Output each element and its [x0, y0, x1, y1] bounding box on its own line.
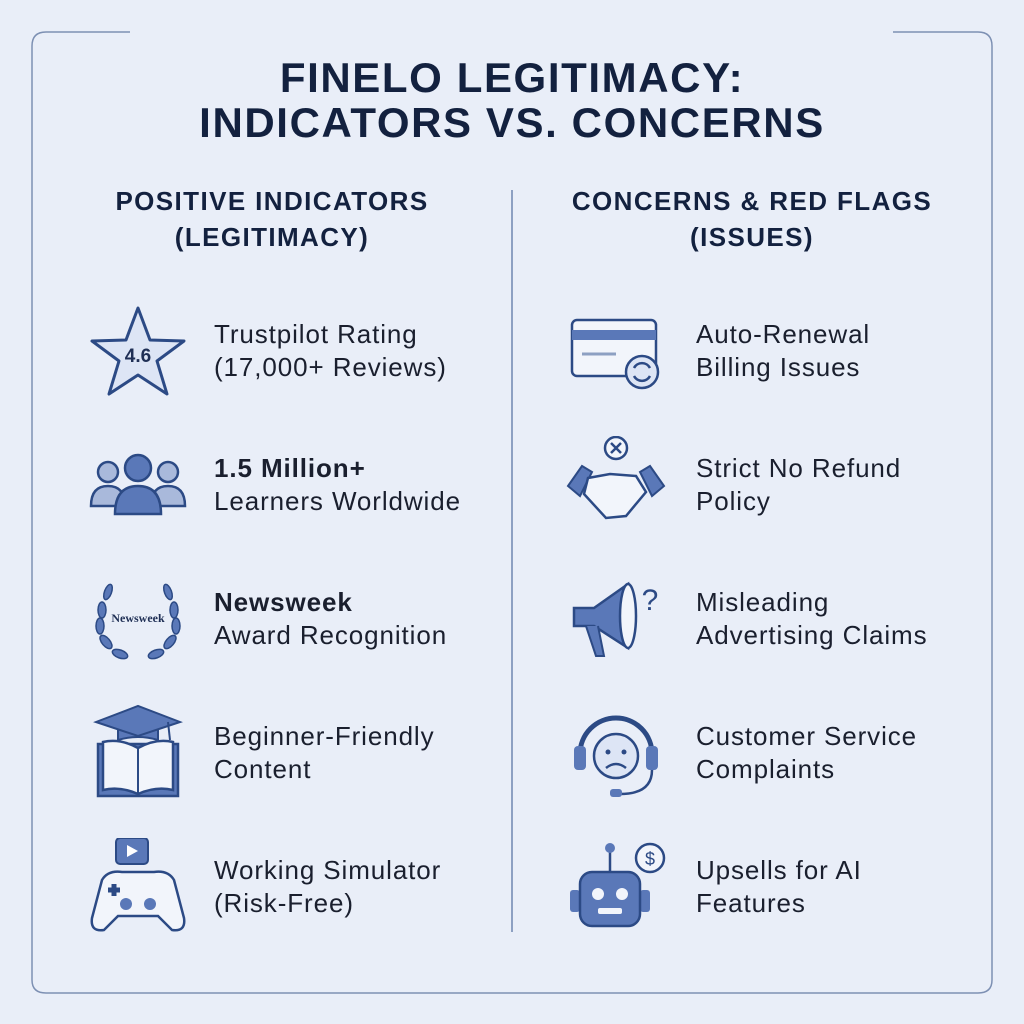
- text: auto-renewal: Auto-Renewal: [696, 319, 870, 349]
- text: upsells: Features: [696, 888, 806, 918]
- text: advertising: Advertising Claims: [696, 620, 928, 650]
- heading: concerns: (ISSUES): [690, 222, 814, 252]
- text: simulator: Working Simulator: [214, 855, 441, 885]
- text: upsells: [696, 855, 862, 918]
- text: customer service: Complaints: [696, 754, 835, 784]
- text: auto-renewal: Billing Issues: [696, 352, 860, 382]
- heading: concerns: CONCERNS & RED FLAGS: [572, 186, 932, 216]
- icon: laurel: [95, 584, 181, 660]
- icon: robot: [570, 842, 666, 928]
- icon: star: [90, 306, 186, 396]
- icon: megaphone: [572, 582, 658, 657]
- heading: positive: (LEGITIMACY): [175, 222, 369, 252]
- heading: positive: POSITIVE INDICATORS: [115, 186, 429, 216]
- text: trustpilot: Trustpilot Rating: [214, 319, 418, 349]
- icon: people: [90, 454, 186, 516]
- text: newsweek: [214, 587, 447, 650]
- title: FINELO LEGITIMACY:: [280, 54, 744, 101]
- text: simulator: [214, 855, 441, 918]
- text: refund: [696, 453, 901, 516]
- text: trustpilot: (17,000+ Reviews): [214, 352, 447, 382]
- text: advertising: Misleading: [696, 587, 829, 617]
- text: learners: 1.5 Million+: [214, 453, 366, 483]
- icon: gamepad: [90, 838, 186, 932]
- heading: concerns: [572, 186, 932, 252]
- icon: megaphone: ?: [642, 584, 658, 617]
- icon: card: [570, 318, 660, 390]
- icon: handshake: [566, 436, 666, 520]
- text: newsweek: Newsweek: [214, 587, 353, 617]
- text: beginner: Content: [214, 754, 311, 784]
- icon: laurel: Newsweek: [111, 611, 165, 625]
- icon: book cap: [93, 704, 183, 798]
- text: customer service: [696, 721, 917, 784]
- icon: robot: $: [645, 849, 655, 869]
- text: simulator: (Risk-Free): [214, 888, 354, 918]
- text: refund: Strict No Refund: [696, 453, 901, 483]
- text: customer service: Customer Service: [696, 721, 917, 751]
- text: trustpilot: [214, 319, 447, 382]
- icon: star: 4.6: [125, 346, 151, 367]
- text: refund: Policy: [696, 486, 771, 516]
- title: [199, 54, 825, 146]
- icon: headset: [574, 716, 658, 797]
- text: advertising: [696, 587, 928, 650]
- text: auto-renewal: [696, 319, 870, 382]
- text: newsweek: Award Recognition: [214, 620, 447, 650]
- heading: positive: [115, 186, 429, 252]
- text: learners: [214, 453, 461, 516]
- divider: [511, 190, 512, 932]
- text: upsells: Upsells for AI: [696, 855, 862, 885]
- text: beginner: Beginner-Friendly: [214, 721, 435, 751]
- text: beginner: [214, 721, 435, 784]
- text: learners: Learners Worldwide: [214, 486, 461, 516]
- title: INDICATORS VS. CONCERNS: [199, 99, 825, 146]
